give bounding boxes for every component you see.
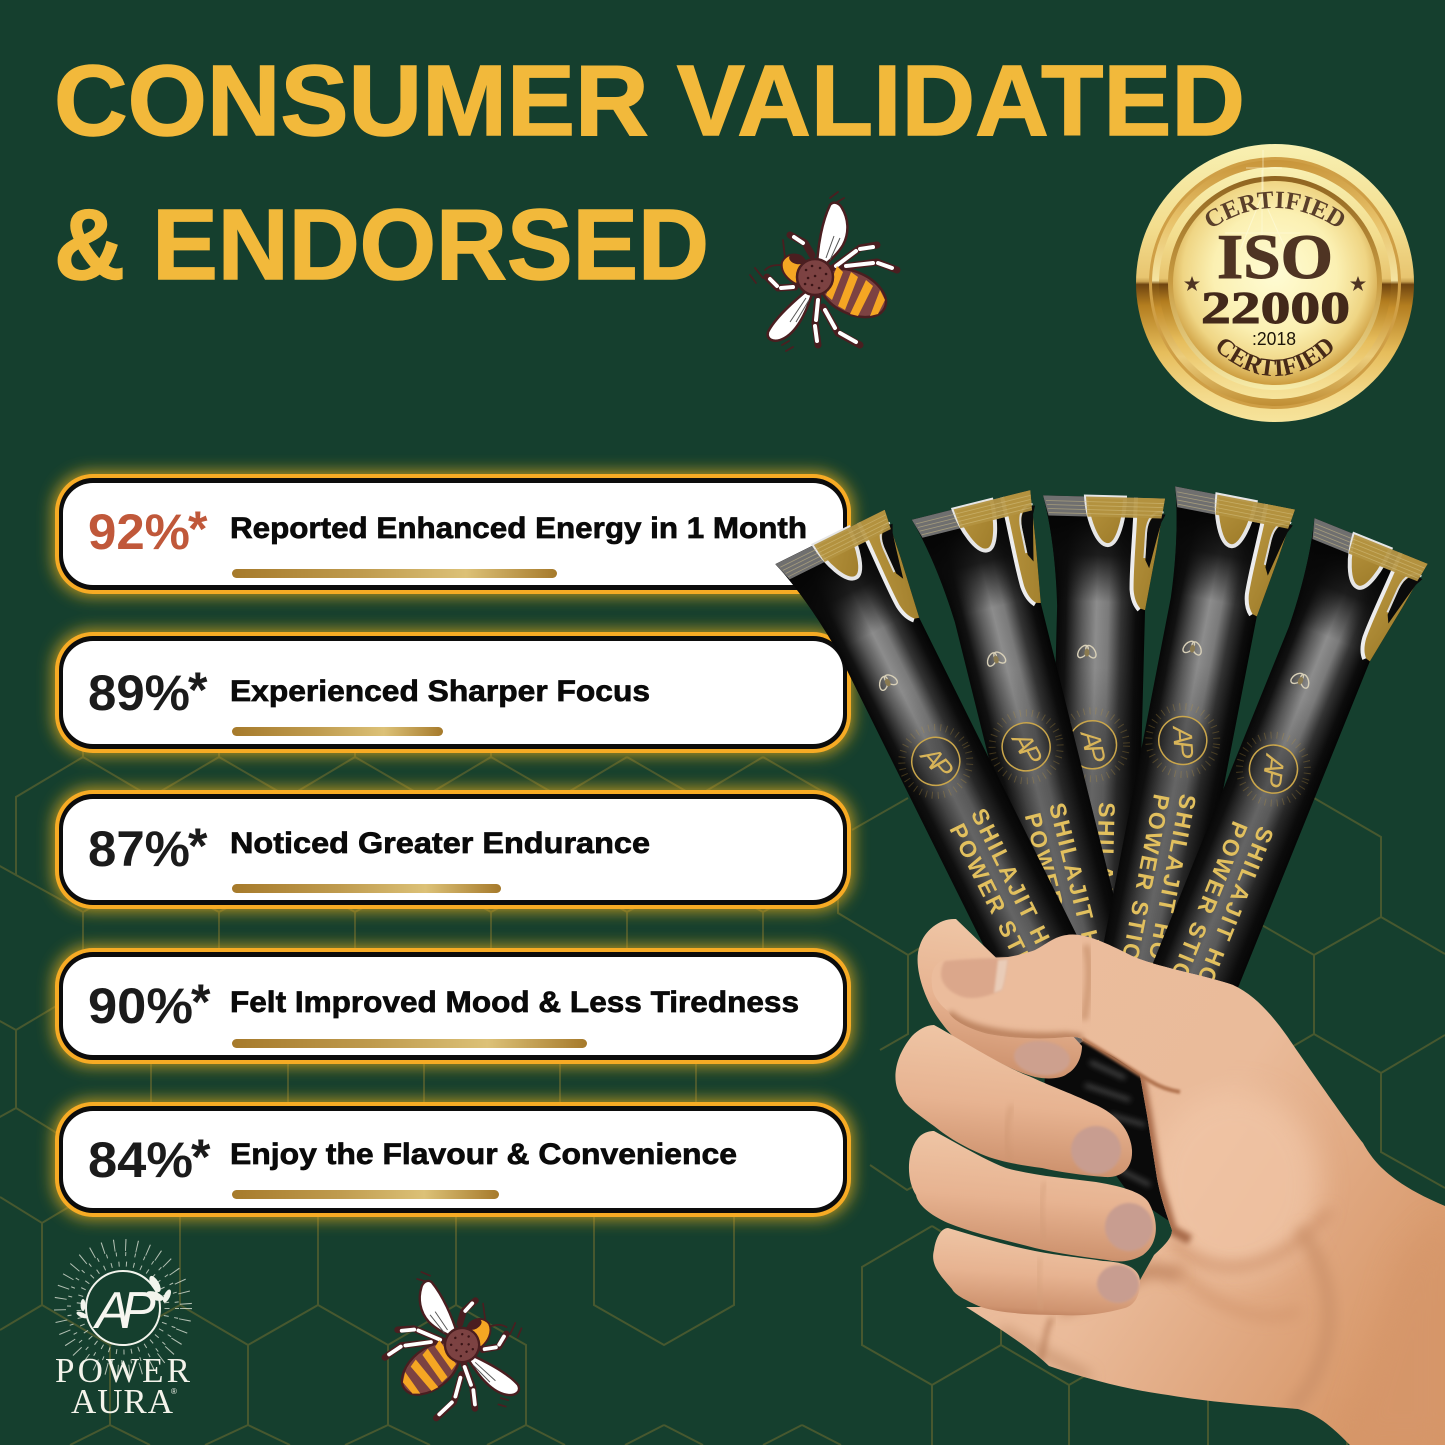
- stat card: 90%: 90%: [88, 978, 193, 1034]
- sachet 5: POWER STICK: [1158, 818, 1253, 1004]
- stat card: 87%: Noticed Greater Endurance: [230, 827, 650, 860]
- index finger: [918, 919, 1082, 1078]
- card glow: [53, 472, 853, 1219]
- sachet 2: [912, 490, 1174, 1092]
- stat card: 89%: Experienced Sharper Focus: [230, 675, 650, 708]
- sachet 3: POWER STICK: [1063, 806, 1094, 997]
- badge: ISO 22000 certified: :2018: [1252, 329, 1296, 349]
- stat card: 92%: 92%: [88, 504, 190, 560]
- badge: ISO 22000 certified: 22000: [1201, 282, 1350, 333]
- sachet 5: AP: [1256, 751, 1290, 789]
- logo: Power Aura: AP: [92, 1282, 156, 1340]
- honeycomb pattern: [0, 750, 1445, 1445]
- sachet 4: SHILAJIT HONEY: [1133, 792, 1201, 1018]
- stat card: 89%: 89%: [88, 665, 190, 721]
- little finger: [933, 1228, 1140, 1315]
- stat card: 84%: [55, 1102, 851, 1217]
- logo: Power Aura: [55, 1245, 191, 1421]
- stat card: 90%: [55, 948, 851, 1064]
- sachet 1: [775, 509, 1148, 1093]
- stat card: 87%: 87%: [88, 821, 190, 877]
- badge: ISO 22000 certified: [1136, 144, 1414, 422]
- badge: ISO 22000 certified: ISO: [1217, 221, 1333, 292]
- palm and wrist: [966, 935, 1445, 1445]
- title: & ENDORSED: [54, 189, 709, 301]
- sachet 1: SHILAJIT HONEY: [966, 804, 1090, 1017]
- stat card: 84%: Enjoy the Flavour & Convenience: [230, 1138, 737, 1171]
- sachet 2: SHILAJIT HONEY: [1044, 800, 1124, 1025]
- stat card: 89%: *: [188, 662, 208, 718]
- logo: Power Aura: POWER: [55, 1351, 191, 1390]
- stat card: 90%: *: [191, 974, 211, 1030]
- stat card: 84%: 84%: [88, 1132, 193, 1188]
- sachet 3: AP: [1074, 726, 1111, 766]
- stat card: 92%: [55, 474, 851, 594]
- sachet 5: SHILAJIT HONEY: [1170, 823, 1279, 1042]
- sachet 2: AP: [1005, 726, 1048, 770]
- ring finger: [909, 1131, 1156, 1261]
- stat card: 92%: *: [188, 501, 208, 557]
- stat card: 92%: Reported Enhanced Energy in 1 Month: [230, 512, 807, 545]
- sachet 4: POWER STICK: [1113, 792, 1175, 983]
- sachet 5: [1093, 518, 1428, 1111]
- stat card: 87%: [55, 790, 851, 909]
- stat card: 84%: *: [191, 1129, 211, 1185]
- stat card: 89%: [55, 632, 851, 753]
- sachet 4: [1063, 486, 1296, 1089]
- middle finger: [895, 1025, 1132, 1177]
- sachet 4: AP: [1167, 723, 1199, 759]
- thumb: [932, 935, 1258, 1092]
- sachet 1: POWER STICK: [945, 819, 1052, 1001]
- sachet 2: POWER STICK: [1020, 810, 1091, 1001]
- badge: ISO 22000 certified: CERTIFIED: [1218, 339, 1333, 376]
- stat card: 90%: Felt Improved Mood & Less Tiredness: [230, 986, 799, 1019]
- logo: Power Aura: AURA: [71, 1382, 174, 1421]
- title: CONSUMER VALIDATED: [54, 45, 1245, 157]
- logo: Power Aura: ®: [171, 1387, 177, 1396]
- stat card: 87%: *: [188, 818, 208, 874]
- icon: bee top: [750, 192, 897, 351]
- badge: ISO 22000 certified: CERTIFIED: [1206, 191, 1344, 226]
- dark sachet bundle inside fist: [1040, 1040, 1175, 1225]
- sachet 3: [1028, 495, 1166, 1088]
- title: [54, 45, 1245, 301]
- icon: bee bottom: [367, 1252, 539, 1432]
- hand gripping sachets: [895, 919, 1445, 1445]
- sachet 3: SHILAJIT HONEY: [1088, 802, 1120, 1028]
- sachet 1: AP: [914, 739, 959, 785]
